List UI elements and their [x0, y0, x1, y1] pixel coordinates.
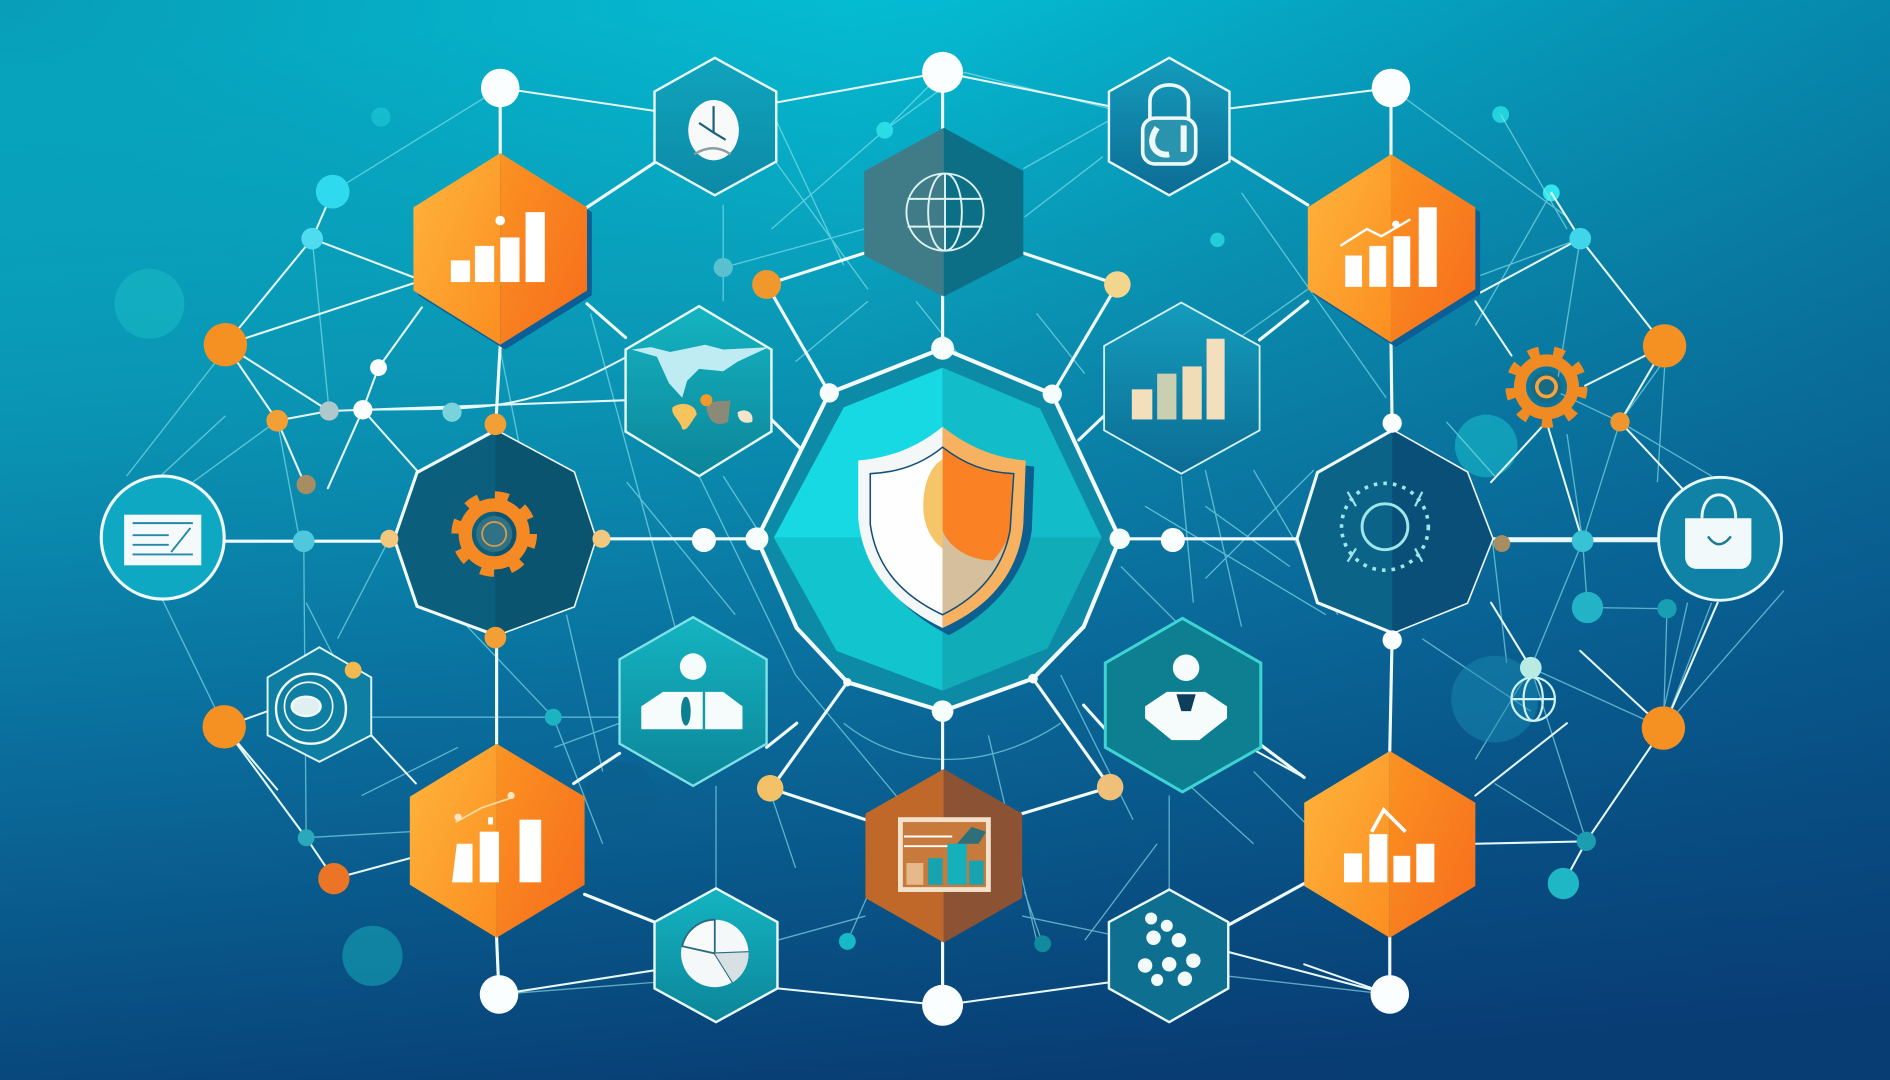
hub inner facets	[774, 368, 1102, 691]
icon: person with badge	[1145, 655, 1227, 740]
thin network mesh lines	[127, 72, 1784, 994]
small amber nodes	[266, 270, 1630, 802]
icon: shield	[858, 427, 1034, 635]
icon: rising bars	[451, 212, 545, 282]
icon: bars with arm	[1344, 810, 1434, 882]
icon: orange gear right	[1510, 351, 1583, 423]
icon: framed chart	[898, 817, 991, 892]
icon: pie chart	[681, 920, 749, 987]
circle: right shopping bag	[1659, 477, 1782, 600]
hexagon: world map	[626, 306, 771, 476]
central hub	[746, 337, 1130, 722]
icon: beige bars	[1132, 339, 1225, 419]
small white nodes	[353, 359, 1402, 650]
icon: padlock	[1143, 85, 1196, 164]
orange hexagon: bottom left bar chart	[410, 744, 585, 938]
orange hexagon: top left bar chart	[413, 153, 592, 350]
large orange nodes	[202, 323, 1686, 894]
small hexagon: top left clock	[655, 58, 776, 195]
icon: circuit ring	[1342, 483, 1428, 570]
octagon: left gear	[394, 430, 595, 635]
icon: wire globe	[906, 174, 984, 251]
large white nodes	[480, 52, 1410, 1026]
orange hexagon: top right bar chart	[1308, 154, 1480, 347]
hub outer band	[757, 348, 1120, 711]
icon: clock	[688, 100, 739, 160]
icon: bars with trend line	[1340, 207, 1437, 287]
icon: orange gear	[457, 497, 532, 571]
hexagon: right bar chart	[1104, 303, 1260, 474]
orange hexagon: bottom right bar chart	[1304, 751, 1475, 938]
icon: world map	[632, 345, 769, 430]
secondary white link lines	[224, 72, 1718, 1005]
icon: dot cluster	[1138, 912, 1201, 986]
icon: document chart	[124, 515, 201, 565]
translucent background circles	[115, 106, 1560, 986]
icon: shopping bag	[1685, 495, 1751, 569]
circle: left document chart	[101, 476, 224, 599]
small hexagon: left swirl	[268, 647, 371, 762]
icon: person with tie	[641, 653, 742, 729]
faded globe: right	[1451, 656, 1555, 742]
hub joints	[746, 337, 1130, 722]
small hexagon: bottom left pie chart	[655, 888, 777, 1022]
thick network connections	[225, 72, 1657, 1005]
small cyan nodes	[293, 122, 1677, 952]
small hexagon: bottom right node cluster	[1109, 890, 1228, 1022]
octagon: right circuit	[1297, 430, 1492, 633]
hexagon: top centre globe	[864, 128, 1023, 297]
hexagon: right person	[1105, 618, 1261, 792]
icon: swirl	[276, 674, 346, 744]
hexagon: bottom centre chart panel	[865, 769, 1022, 943]
small hexagon: top right lock	[1109, 58, 1229, 195]
icon: bars with sparks	[452, 792, 541, 882]
hexagon: left person	[620, 617, 767, 786]
icon: faded globe	[1512, 677, 1555, 721]
